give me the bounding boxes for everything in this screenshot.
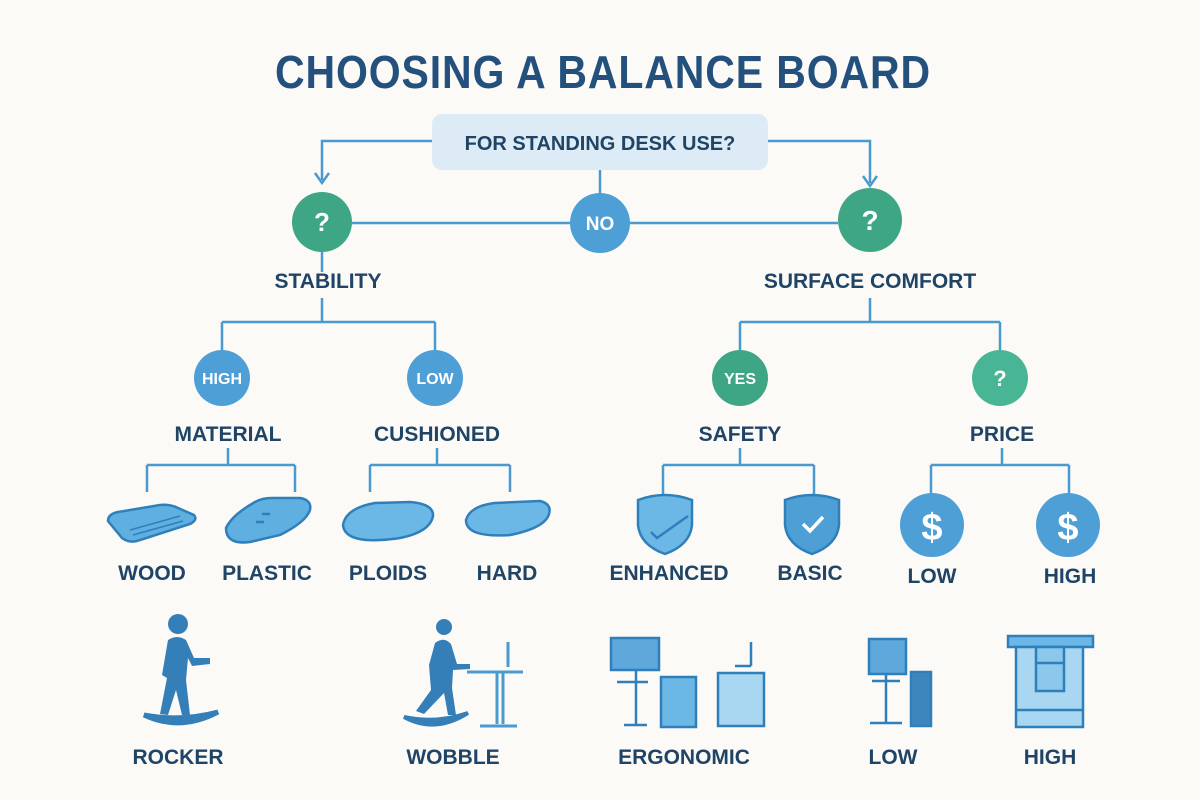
- node: YES: [712, 350, 768, 406]
- node: left question: [292, 192, 352, 252]
- label: stability: STABILITY: [275, 270, 381, 293]
- node: right question: ?: [861, 205, 879, 236]
- labels: options: PLOIDS: [349, 562, 427, 585]
- icon: dollar low: [900, 493, 964, 557]
- node: LOW: [407, 350, 463, 406]
- icon: rocker person: [144, 614, 218, 723]
- node: LOW: LOW: [416, 371, 455, 388]
- labels: board types: WOBBLE: [406, 746, 500, 769]
- icon: dollar high: [1036, 493, 1100, 557]
- icon: high cabinet: [1008, 636, 1093, 727]
- node: YES: YES: [724, 371, 756, 388]
- node: ?: [972, 350, 1028, 406]
- label: surface comfort: SURFACE COMFORT: [764, 270, 976, 293]
- label: price: PRICE: [970, 423, 1034, 446]
- node: HIGH: HIGH: [202, 371, 242, 388]
- icon: low desk: [869, 639, 931, 726]
- icon: ergonomic desks: [611, 638, 764, 727]
- icon: dollar low: $: [921, 507, 943, 549]
- node: NO: [570, 193, 630, 253]
- question box: [432, 114, 768, 170]
- label: cushioned: CUSHIONED: [374, 423, 500, 446]
- icon: wobble person at desk: [404, 619, 523, 726]
- labels: options: WOOD: [118, 562, 186, 585]
- label: material: MATERIAL: [175, 423, 282, 446]
- icon: hard board: [466, 501, 550, 535]
- labels: options: PLASTIC: [222, 562, 312, 585]
- label: safety: SAFETY: [699, 423, 781, 446]
- icon: shield basic: [785, 495, 839, 554]
- labels: board types: [132, 746, 1076, 769]
- labels: board types: HIGH: [1024, 746, 1076, 769]
- icon: plastic board: [226, 498, 310, 542]
- icon: ploids board: [343, 502, 433, 540]
- icon: shield enhanced: [638, 495, 692, 554]
- title: CHOOSING A BALANCE BOARD: [275, 46, 931, 98]
- labels: options: BASIC: [777, 562, 843, 585]
- labels: board types: ERGONOMIC: [618, 746, 750, 769]
- node: ?: ?: [993, 366, 1007, 391]
- labels: board types: ROCKER: [132, 746, 224, 769]
- labels: options: LOW: [908, 565, 957, 588]
- icon: wood board: [108, 505, 195, 542]
- labels: board types: LOW: [869, 746, 918, 769]
- labels: options: [118, 562, 1096, 588]
- node: NO: NO: [586, 214, 614, 235]
- node: right question: [838, 188, 902, 252]
- node: left question: ?: [314, 207, 330, 237]
- question box: FOR STANDING DESK USE?: [465, 133, 735, 155]
- labels: options: ENHANCED: [609, 562, 729, 585]
- icon: dollar high: $: [1057, 507, 1079, 549]
- node: HIGH: [194, 350, 250, 406]
- labels: options: HARD: [477, 562, 537, 585]
- labels: options: HIGH: [1044, 565, 1096, 588]
- connectors: [147, 141, 1069, 494]
